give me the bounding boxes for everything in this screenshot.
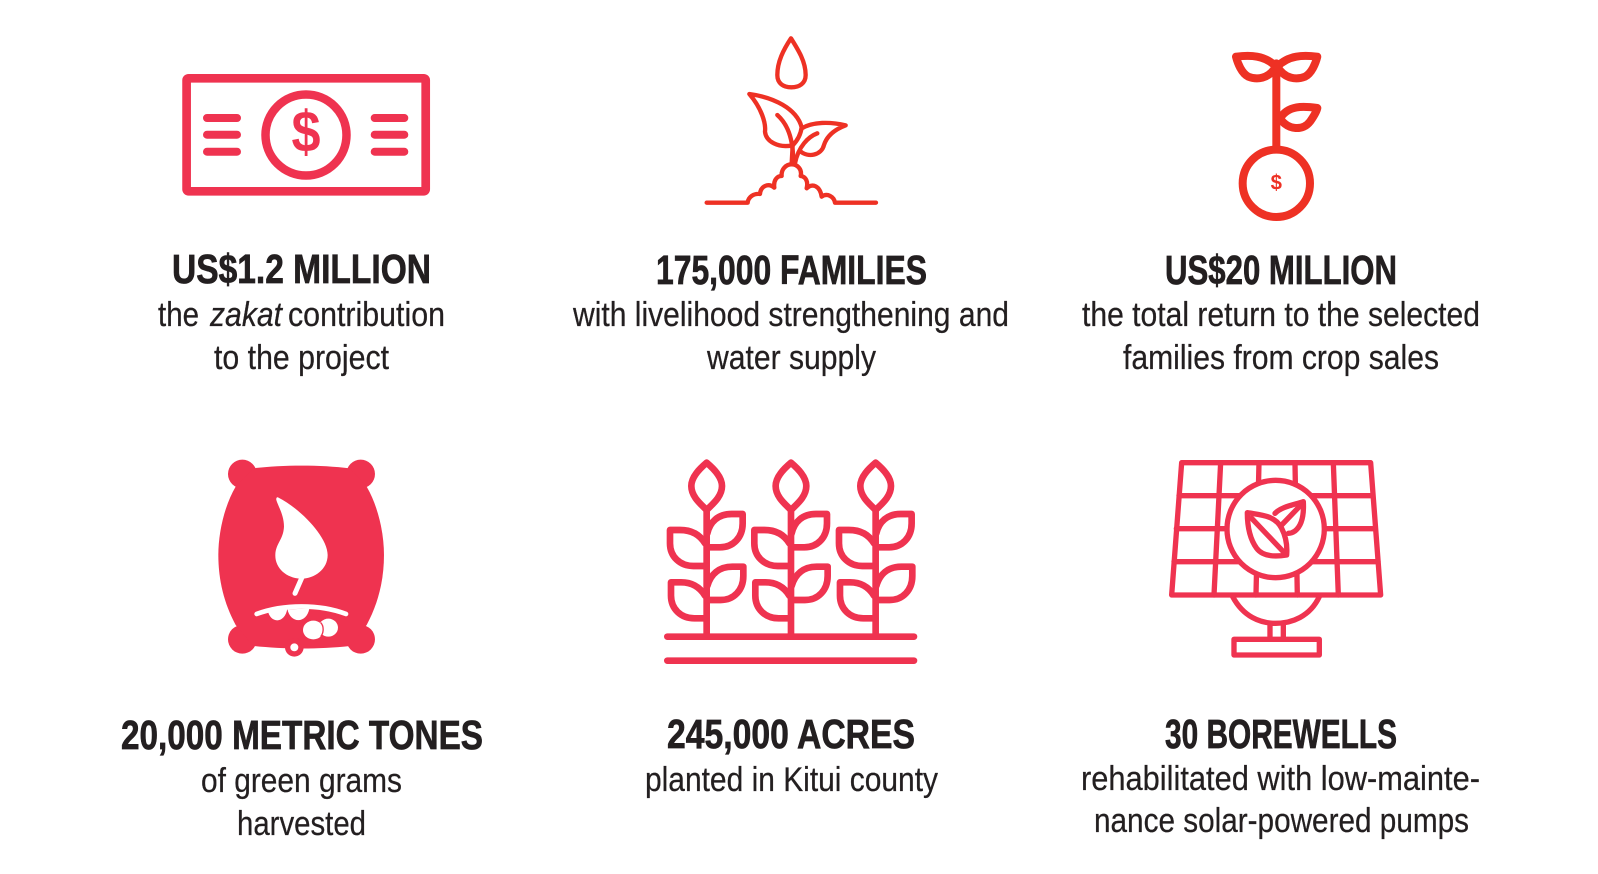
text: the zakat contribution to the project: the: [158, 296, 199, 334]
icon: coin with sprout: $: [1271, 170, 1282, 194]
text: the zakat contribution to the project: zakat: [209, 296, 283, 334]
panel: zakat contribution: [158, 78, 445, 377]
text: with livelihood strengthening and water supply: with livelihood strengthening and: [572, 296, 1009, 334]
heading: US$1.2 million: US$1.2 MILLION: [172, 246, 431, 292]
text: the zakat contribution to the project: [158, 296, 445, 377]
icon: banknote: $: [292, 100, 320, 164]
text: rehabilitated with low-maintenance solar-powered pumps: nance solar-powered pumps: [1094, 802, 1469, 840]
text: the zakat contribution to the project: contribution: [288, 296, 445, 334]
text: planted in Kitui county: planted in Kitui county: [645, 761, 938, 799]
icon: solar panel with leaves: [1172, 463, 1381, 655]
heading: 175,000 families: 175,000 FAMILIES: [656, 247, 927, 293]
text: of green grams harvested: of green grams: [201, 762, 402, 800]
icon: banknote: [187, 78, 426, 191]
text: with livelihood strengthening and water supply: water supply: [706, 339, 876, 377]
text: of green grams harvested: [201, 762, 402, 843]
heading: 245,000 acres: 245,000 ACRES: [667, 711, 915, 757]
icon: water drop and seedling: [707, 38, 876, 203]
icon: grain sack: [218, 460, 384, 657]
heading: US$20 million: US$20 MILLION: [1165, 247, 1397, 293]
heading: 20,000 metric tones: 20,000 METRIC TONES: [121, 712, 483, 758]
heading: 30 borewells: 30 BOREWELLS: [1165, 711, 1397, 757]
text: the total return to the selected families from crop sales: [1082, 296, 1480, 377]
text: rehabilitated with low-maintenance solar-powered pumps: rehabilitated with low-mainte-: [1081, 760, 1480, 798]
text: with livelihood strengthening and water supply: [572, 296, 1009, 377]
panel: acres planted: [645, 463, 938, 799]
icon: rows of crops: [667, 463, 914, 661]
panel: green grams harvested: [121, 460, 483, 843]
text: the total return to the selected families from crop sales: families from crop sales: [1123, 339, 1439, 377]
icon: coin with sprout: [1236, 56, 1317, 217]
text: the zakat contribution to the project: to the project: [214, 339, 389, 377]
text: of green grams harvested: harvested: [237, 805, 366, 843]
panel: crop sales return: [1082, 56, 1480, 377]
text: rehabilitated with low-maintenance solar-powered pumps: [1081, 760, 1480, 840]
panel: families: [572, 38, 1009, 377]
text: the total return to the selected families from crop sales: the total return to the selected: [1082, 296, 1480, 334]
panel: borewells: [1081, 463, 1480, 840]
